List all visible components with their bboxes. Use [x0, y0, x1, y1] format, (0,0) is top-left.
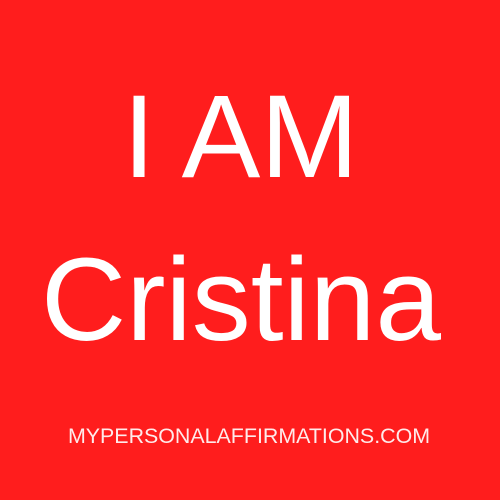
- heading: Cristina: Cristina: [41, 234, 441, 366]
- text: website: MYPERSONALAFFIRMATIONS.COM: [68, 424, 430, 448]
- heading: I AM: I AM: [123, 71, 359, 203]
